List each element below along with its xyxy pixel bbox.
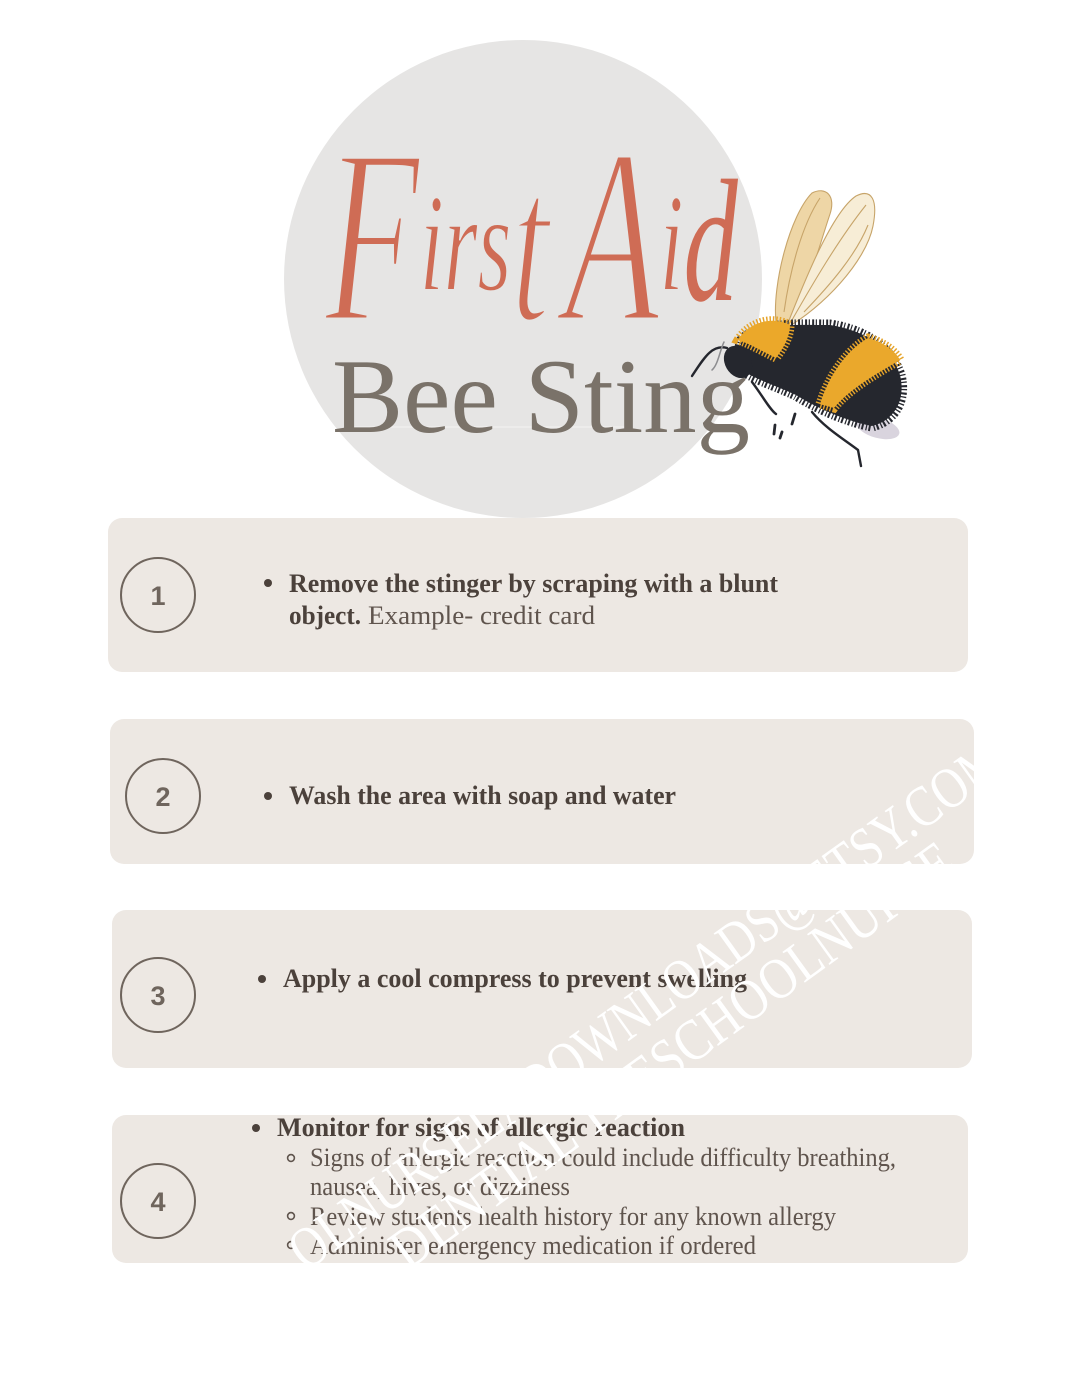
- title: First Aid: d: [684, 145, 739, 338]
- number badge 3: [121, 958, 195, 1032]
- number badge 1: [121, 558, 195, 632]
- step 4 text: [252, 1113, 896, 1260]
- step 2 text: Wash the area with soap and water: [289, 781, 676, 810]
- watermark: DENTIAL THESCHOOLNURSE: [377, 828, 967, 1282]
- title: First Aid: i: [659, 166, 684, 321]
- title: First Aid: F: [324, 98, 421, 374]
- step 1 text: [264, 569, 778, 630]
- bee legs and antennae: [692, 342, 861, 466]
- subtitle: Bee Sting: Bee Sting: [332, 338, 750, 455]
- step 4 text: Signs of allergic reaction could include difficulty breathing,: [310, 1143, 896, 1172]
- title: First Aid: t: [511, 124, 552, 368]
- panel: step 1: [108, 518, 968, 672]
- step 1 text: Example- credit card: [368, 601, 595, 630]
- title: First Aid: [324, 98, 739, 374]
- number badge 3: 3: [150, 981, 166, 1011]
- number badge 2: 2: [155, 782, 171, 812]
- header circle: [284, 40, 762, 518]
- panel: step 3: [112, 910, 972, 1068]
- panel: step 4: [112, 1113, 968, 1263]
- step 4 text: Monitor for signs of allergic reaction: [277, 1113, 686, 1142]
- title: First Aid: A: [556, 98, 660, 374]
- bee body: [718, 321, 902, 443]
- title: First Aid: irs: [420, 166, 511, 321]
- step 4 text: Review students health history for any known allergy: [310, 1202, 836, 1231]
- bee wings: [775, 191, 875, 328]
- number badge 4: 4: [150, 1187, 166, 1217]
- step 3 text: Apply a cool compress to prevent swelling: [283, 964, 747, 993]
- icon: bumblebee: [692, 191, 902, 466]
- number badge 1: 1: [150, 581, 166, 611]
- number badge 4: [121, 1164, 195, 1238]
- step 4 text: Administer emergency medication if ordered: [310, 1231, 756, 1260]
- step 4 text: nausea, hives, or dizziness: [310, 1172, 570, 1201]
- panel: step 2: [110, 719, 974, 864]
- number badge 2: [126, 759, 200, 833]
- step 1 text: object.: [289, 601, 361, 630]
- step 1 text: Remove the stinger by scraping with a blunt: [289, 569, 778, 598]
